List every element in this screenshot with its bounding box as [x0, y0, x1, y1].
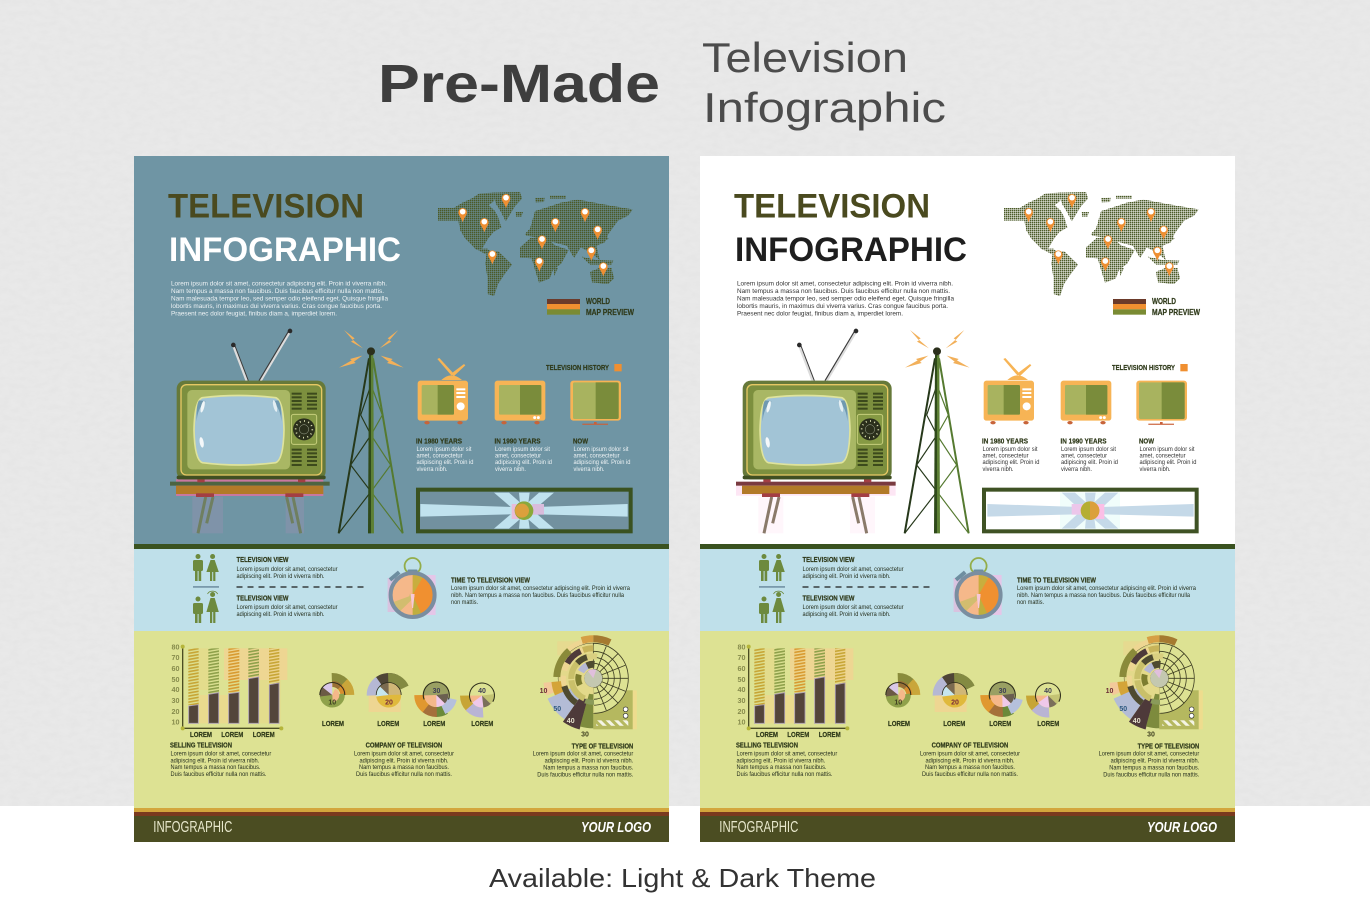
history column: 1980: Lorem ipsum dolor sit	[416, 446, 472, 453]
history column: now: Lorem ipsum dolor sit	[1140, 446, 1195, 453]
viewer text bottom: Lorem ipsum dolor sit amet, consectetur	[236, 604, 338, 611]
viewer text bottom: adipiscing elit. Proin id viverra nibh.	[236, 611, 325, 618]
text: company of television: Nam tempus a massa non faucibus.	[925, 764, 1015, 771]
text: company of television: COMPANY OF TELEVISION	[932, 741, 1008, 750]
title: Pre-Made: Pre-Made	[378, 54, 660, 114]
pie chart 10: 10	[328, 700, 336, 706]
bar chart: selling television	[738, 642, 853, 739]
bar chart: selling television: 30	[738, 696, 746, 705]
intro text block: lobortis mauris, in maximus dui viverra varius. Cras congue faucibus porta.	[171, 303, 382, 310]
radial chart: type of television: 30	[581, 732, 589, 738]
text: company of television: COMPANY OF TELEVISION	[366, 741, 442, 750]
map legend label: WORLD	[1152, 296, 1176, 306]
pie chart 20: LOREM	[377, 719, 399, 728]
caption: available themes: Available: Light & Dark Theme	[489, 863, 876, 893]
icon: stopwatch	[954, 558, 1002, 617]
pie chart 40: LOREM	[1037, 719, 1059, 728]
header background	[700, 156, 1235, 544]
time to television view text: nibh. Nam tempus a massa non faucibus. Duis faucibus efficitur nulla	[1017, 592, 1191, 599]
intro text block: Nam tempus a massa non faucibus. Duis faucibus efficitur nulla non mattis.	[737, 288, 950, 295]
text: type of television: Lorem ipsum dolor sit amet, consectetur	[533, 751, 633, 758]
viewer text bottom	[802, 594, 904, 618]
radial chart: type of television: 10	[540, 688, 547, 695]
pie chart 40: 40	[478, 688, 486, 695]
radial chart: type of television: 50	[553, 706, 561, 713]
viewer text top: adipiscing elit. Proin id viverra nibh.	[802, 573, 891, 580]
heading: Television Infographic: INFOGRAPHIC	[169, 231, 401, 269]
pie chart 20: LOREM	[943, 719, 965, 728]
viewer text bottom: TELEVISION VIEW	[802, 594, 855, 602]
text: type of television: Nam tempus a massa non faucibus.	[543, 764, 634, 771]
viewer text top	[236, 555, 338, 580]
history column: now: NOW	[573, 437, 588, 446]
history column: now: viverra nibh.	[574, 466, 605, 473]
intro text block: Nam malesuada tempor leo, sed semper odio eleifend eget. Quisque fringilla	[737, 296, 955, 303]
intro text block: Nam malesuada tempor leo, sed semper odio eleifend eget. Quisque fringilla	[171, 296, 389, 303]
bar chart: selling television: 30	[172, 696, 180, 705]
viewer text top: TELEVISION VIEW	[236, 555, 289, 564]
intro text block	[171, 280, 389, 318]
pie chart 20: 20	[385, 700, 393, 706]
history column: 1990: amet, consectetur	[1061, 452, 1107, 460]
text: selling television: Nam tempus a massa non faucibus.	[170, 764, 261, 771]
map legend label: MAP PREVIEW	[1152, 307, 1200, 317]
footer: infographic and logo	[153, 819, 652, 836]
pie chart 30: 30	[999, 688, 1006, 695]
map legend label: WORLD	[586, 296, 610, 306]
subtitle: Television Infographic	[702, 34, 946, 131]
intro text block: lobortis mauris, in maximus dui viverra varius. Cras congue faucibus porta.	[737, 303, 948, 310]
intro text block: Praesent nec dolor feugiat, finibus diam a, imperdiet lorem.	[737, 311, 903, 318]
history column: 1990: amet, consectetur	[495, 452, 541, 460]
bar chart: selling television: 70	[172, 653, 180, 662]
time to television view text	[1017, 576, 1197, 606]
footer: infographic and logo: YOUR LOGO	[581, 820, 652, 836]
bar chart: selling television: LOREM	[221, 730, 243, 739]
text: selling television	[170, 741, 271, 778]
history column: 1980: viverra nibh.	[416, 466, 448, 473]
bar chart: selling television: 50	[738, 675, 746, 684]
text: selling television: Lorem ipsum dolor sit amet, consectetur	[170, 750, 271, 757]
world map with pins	[438, 192, 633, 315]
pie chart 30: LOREM	[423, 719, 445, 728]
bar chart: selling television: 40	[738, 685, 746, 694]
table	[170, 479, 330, 533]
text: selling television: Duis faucibus efficitur nulla non mattis.	[736, 771, 833, 778]
time to television view text	[451, 576, 631, 606]
bar chart: selling television: 70	[738, 653, 746, 662]
bar chart: selling television: LOREM	[190, 730, 212, 739]
bar chart: selling television: 80	[172, 642, 180, 652]
pie chart 10: LOREM	[888, 719, 910, 728]
text: company of television: adipiscing elit. Proin id viverra nibh.	[360, 757, 449, 764]
radial chart: type of television	[1100, 619, 1218, 738]
viewer text bottom: adipiscing elit. Proin id viverra nibh.	[802, 611, 891, 618]
panel: light theme infographic	[700, 156, 1235, 842]
text: company of television: Nam tempus a massa non faucibus.	[359, 764, 449, 771]
pie chart 40	[458, 671, 506, 728]
history column: now: adipiscing elit. Proin id	[1140, 459, 1197, 466]
pie chart 10	[874, 670, 923, 728]
viewer text bottom: Lorem ipsum dolor sit amet, consectetur	[802, 604, 904, 611]
map legend label: MAP PREVIEW	[586, 307, 634, 317]
time to television view text: non mattis.	[1017, 599, 1044, 606]
history column: 1990: adipiscing elit. Proin id	[1061, 459, 1119, 466]
history column: 1980: amet, consectetur	[982, 452, 1028, 460]
pie chart 30	[978, 671, 1026, 728]
pie chart 20	[369, 676, 408, 728]
history column: 1980: Lorem ipsum dolor sit	[982, 446, 1038, 453]
history column: 1980	[416, 437, 474, 473]
time to television view text: nibh. Nam tempus a massa non faucibus. Duis faucibus efficitur nulla	[451, 592, 625, 599]
history column: 1980: amet, consectetur	[416, 452, 462, 460]
table	[736, 482, 896, 533]
section: viewers	[193, 554, 631, 623]
bar chart: selling television: LOREM	[819, 730, 841, 739]
map legend label	[586, 296, 634, 317]
bar chart: selling television: LOREM	[756, 730, 778, 739]
radial chart: type of television: 40	[567, 718, 575, 725]
time to television view text: non mattis.	[451, 599, 478, 606]
icon: stopwatch	[388, 558, 436, 617]
bar chart: selling television: LOREM	[253, 730, 275, 739]
text: type of television: Nam tempus a massa non faucibus.	[1109, 764, 1200, 771]
intro text block: Nam tempus a massa non faucibus. Duis faucibus efficitur nulla non mattis.	[171, 288, 384, 295]
history column: now: amet, consectetur	[1140, 452, 1186, 460]
illustration: broadcast tower	[905, 330, 970, 533]
text: selling television: adipiscing elit. Proin id viverra nibh.	[736, 757, 825, 764]
history column: now: viverra nibh.	[1140, 466, 1171, 473]
text: company of television: adipiscing elit. Proin id viverra nibh.	[926, 757, 1015, 764]
bar chart: selling television: LOREM	[787, 730, 809, 739]
viewer text bottom	[236, 594, 338, 618]
text: selling television: Duis faucibus efficitur nulla non mattis.	[170, 771, 267, 778]
world map with pins	[1004, 192, 1199, 315]
panel: dark theme infographic	[134, 156, 669, 842]
test pattern screen	[984, 490, 1197, 531]
text: company of television: Duis faucibus efficitur nulla non mattis.	[356, 771, 452, 778]
history column: now: Lorem ipsum dolor sit	[574, 446, 629, 453]
text: company of television: Lorem ipsum dolor sit amet, consectetur	[354, 750, 454, 757]
time to television view text: TIME TO TELEVISION VIEW	[1017, 576, 1096, 584]
bar chart: selling television: 10	[172, 718, 180, 726]
illustration: retro television	[177, 329, 326, 482]
text: selling television: SELLING TELEVISION	[170, 741, 232, 750]
text: selling television: Nam tempus a massa non faucibus.	[736, 764, 827, 771]
history column: 1980: viverra nibh.	[982, 466, 1014, 473]
history column: 1990: IN 1990 YEARS	[1060, 437, 1107, 446]
radial chart: type of television: 30	[1147, 732, 1155, 738]
text: company of television	[354, 741, 454, 778]
viewer text top: TELEVISION VIEW	[802, 555, 855, 564]
heading: Television Infographic: INFOGRAPHIC	[735, 231, 967, 269]
heading: Television Infographic	[168, 188, 401, 269]
history column: 1980	[982, 437, 1040, 473]
text: type of television: adipiscing elit. Proin id viverra nibh.	[545, 758, 634, 765]
text: type of television: TYPE OF TELEVISION	[572, 741, 633, 750]
test pattern screen	[418, 490, 631, 531]
viewer text top	[802, 555, 904, 580]
radial chart: type of television: 40	[1133, 718, 1141, 725]
text: company of television: Duis faucibus efficitur nulla non mattis.	[922, 771, 1018, 778]
intro text block: Praesent nec dolor feugiat, finibus diam a, imperdiet lorem.	[171, 311, 337, 318]
intro text block	[737, 280, 955, 318]
text: selling television: Lorem ipsum dolor sit amet, consectetur	[736, 750, 837, 757]
history column: 1990: viverra nibh.	[1061, 466, 1092, 473]
footer: infographic and logo	[719, 819, 1218, 836]
section: viewers	[759, 554, 1197, 623]
footer: infographic and logo: INFOGRAPHIC	[719, 819, 798, 836]
television history icons	[418, 358, 622, 425]
text: selling television: SELLING TELEVISION	[736, 741, 798, 750]
radial chart: type of television: 50	[1119, 706, 1127, 713]
history column: 1980: adipiscing elit. Proin id	[416, 459, 474, 466]
history column: now: NOW	[1139, 437, 1154, 446]
text: type of television: TYPE OF TELEVISION	[1138, 741, 1199, 750]
text: selling television	[736, 741, 837, 778]
pie chart 40	[1024, 671, 1072, 728]
map legend label	[1152, 296, 1200, 317]
pie chart 10: LOREM	[322, 719, 344, 728]
subtitle: Television Infographic: Infographic	[703, 84, 946, 131]
pie chart 40: LOREM	[471, 719, 493, 728]
text: type of television	[1099, 741, 1200, 778]
pie chart 10	[308, 670, 357, 728]
bar chart: selling television: 40	[172, 685, 180, 694]
bar chart: selling television: 20	[738, 707, 746, 716]
viewer text top: adipiscing elit. Proin id viverra nibh.	[236, 573, 325, 580]
history column: now	[573, 437, 631, 473]
pie chart 30	[412, 671, 460, 728]
time to television view text: Lorem ipsum dolor sit amet, consectetur adipiscing elit. Proin id viverra	[1017, 585, 1197, 592]
viewer text top: Lorem ipsum dolor sit amet, consectetur	[236, 566, 338, 573]
text: company of television: Lorem ipsum dolor sit amet, consectetur	[920, 750, 1020, 757]
text: selling television: adipiscing elit. Proin id viverra nibh.	[170, 757, 259, 764]
text: company of television	[920, 741, 1020, 778]
viewer text bottom: TELEVISION VIEW	[236, 594, 289, 602]
illustration: broadcast tower	[339, 330, 404, 533]
history column: 1980: adipiscing elit. Proin id	[982, 459, 1040, 466]
intro text block: Lorem ipsum dolor sit amet, consectetur adipiscing elit. Proin id viverra nibh.	[171, 280, 387, 288]
intro text block: Lorem ipsum dolor sit amet, consectetur adipiscing elit. Proin id viverra nibh.	[737, 280, 953, 288]
history column: 1990: Lorem ipsum dolor sit	[495, 446, 550, 453]
history column: now: amet, consectetur	[574, 452, 620, 460]
label: television history: TELEVISION HISTORY	[1112, 363, 1175, 372]
bar chart: selling television: 60	[172, 664, 180, 673]
bar chart: selling television: 20	[172, 707, 180, 716]
radial chart: type of television	[534, 619, 652, 738]
television history icons	[984, 358, 1188, 425]
bar chart: selling television: 80	[738, 642, 746, 652]
subtitle: Television Infographic: Television	[702, 34, 908, 81]
history column: now	[1139, 437, 1197, 473]
heading: Television Infographic	[734, 188, 967, 269]
header background	[134, 156, 669, 544]
pie chart 40: 40	[1044, 688, 1052, 695]
time to television view text: Lorem ipsum dolor sit amet, consectetur adipiscing elit. Proin id viverra	[451, 585, 631, 592]
label: television history: TELEVISION HISTORY	[546, 363, 609, 372]
illustration: retro television	[743, 329, 892, 482]
text: type of television	[533, 741, 634, 778]
pie chart 20: 20	[951, 700, 959, 706]
heading: Television Infographic: TELEVISION	[168, 188, 364, 226]
bar chart: selling television: 10	[738, 718, 746, 726]
text: type of television: Duis faucibus efficitur nulla non mattis.	[537, 771, 634, 778]
history column: now: adipiscing elit. Proin id	[574, 459, 631, 466]
bar chart: selling television: 50	[172, 675, 180, 684]
footer: infographic and logo: YOUR LOGO	[1147, 820, 1218, 836]
text: type of television: Duis faucibus efficitur nulla non mattis.	[1103, 771, 1200, 778]
bar chart: selling television	[172, 642, 287, 739]
history column: 1990	[1060, 437, 1119, 473]
bar chart: selling television: 60	[738, 664, 746, 673]
radial chart: type of television: 10	[1106, 688, 1113, 695]
history column: 1990: IN 1990 YEARS	[494, 437, 541, 446]
pie chart 30: LOREM	[989, 719, 1011, 728]
heading: Television Infographic: TELEVISION	[734, 188, 930, 226]
pie chart 30: 30	[433, 688, 440, 695]
text: type of television: Lorem ipsum dolor sit amet, consectetur	[1099, 751, 1199, 758]
pie chart 10: 10	[894, 700, 902, 706]
history column: 1980: IN 1980 YEARS	[982, 437, 1028, 446]
history column: 1990: viverra nibh.	[495, 466, 526, 473]
icon: viewer figures	[759, 554, 785, 623]
time to television view text: TIME TO TELEVISION VIEW	[451, 576, 530, 584]
icon: viewer figures	[193, 554, 219, 623]
history column: 1990	[494, 437, 553, 473]
history column: 1980: IN 1980 YEARS	[416, 437, 462, 446]
footer: infographic and logo: INFOGRAPHIC	[153, 819, 232, 836]
viewer text top: Lorem ipsum dolor sit amet, consectetur	[802, 566, 904, 573]
pie chart 20	[935, 676, 974, 728]
text: type of television: adipiscing elit. Proin id viverra nibh.	[1111, 758, 1200, 765]
history column: 1990: adipiscing elit. Proin id	[495, 459, 553, 466]
history column: 1990: Lorem ipsum dolor sit	[1061, 446, 1116, 453]
